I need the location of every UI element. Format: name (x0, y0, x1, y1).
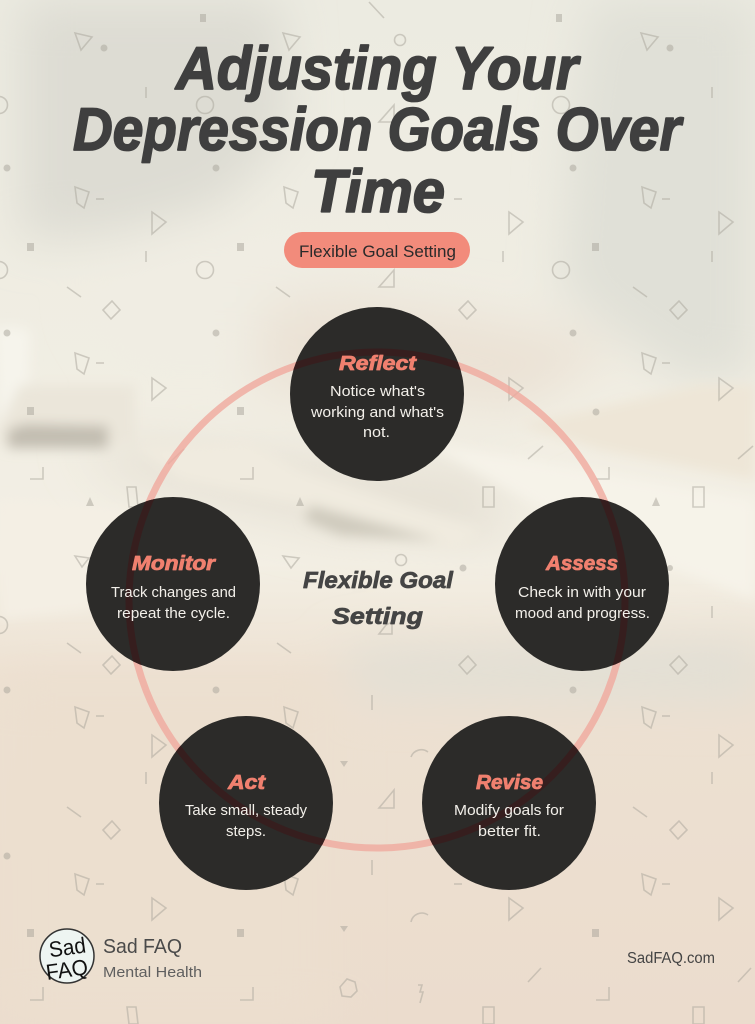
step: Monitor: Track changes and (111, 584, 236, 601)
step: Act (159, 716, 333, 890)
step: Act: Act (227, 772, 267, 794)
logo: FAQ (44, 954, 89, 985)
website: SadFAQ.com (627, 950, 715, 967)
step: Revise: better fit. (478, 823, 541, 840)
step: Act: Take small, steady (185, 802, 307, 819)
logo: Sad (47, 932, 87, 962)
step: Assess (495, 497, 669, 671)
step: Revise (422, 716, 596, 890)
step: Reflect: Notice what's (330, 383, 425, 400)
step: Monitor (86, 497, 260, 671)
step: Assess: Assess (545, 553, 618, 575)
step: Act: steps. (226, 823, 266, 840)
step: Assess: Check in with your (518, 584, 646, 601)
brand name (103, 936, 202, 981)
cycle ring (129, 352, 625, 848)
step: Revise: Revise (476, 772, 543, 794)
step: Reflect: Reflect (339, 353, 418, 375)
center label (303, 567, 454, 629)
center label: Setting (332, 603, 423, 629)
step: Reflect (290, 307, 464, 481)
subtitle pill (284, 232, 470, 268)
logo (40, 929, 94, 985)
step: Assess: mood and progress. (515, 605, 650, 622)
title: Depression Goals Over (73, 96, 684, 163)
title: Time (311, 158, 445, 225)
title (73, 35, 684, 225)
subtitle pill: Flexible Goal Setting (299, 242, 456, 261)
center label: Flexible Goal (303, 567, 454, 593)
step: Monitor: Monitor (132, 553, 216, 575)
step: Reflect: not. (363, 424, 390, 441)
brand name: Mental Health (103, 964, 202, 981)
step: Revise: Modify goals for (454, 802, 564, 819)
title: Adjusting Your (174, 35, 581, 102)
step: Reflect: working and what's (310, 404, 444, 421)
brand name: Sad FAQ (103, 936, 182, 958)
step: Monitor: repeat the cycle. (117, 605, 230, 622)
